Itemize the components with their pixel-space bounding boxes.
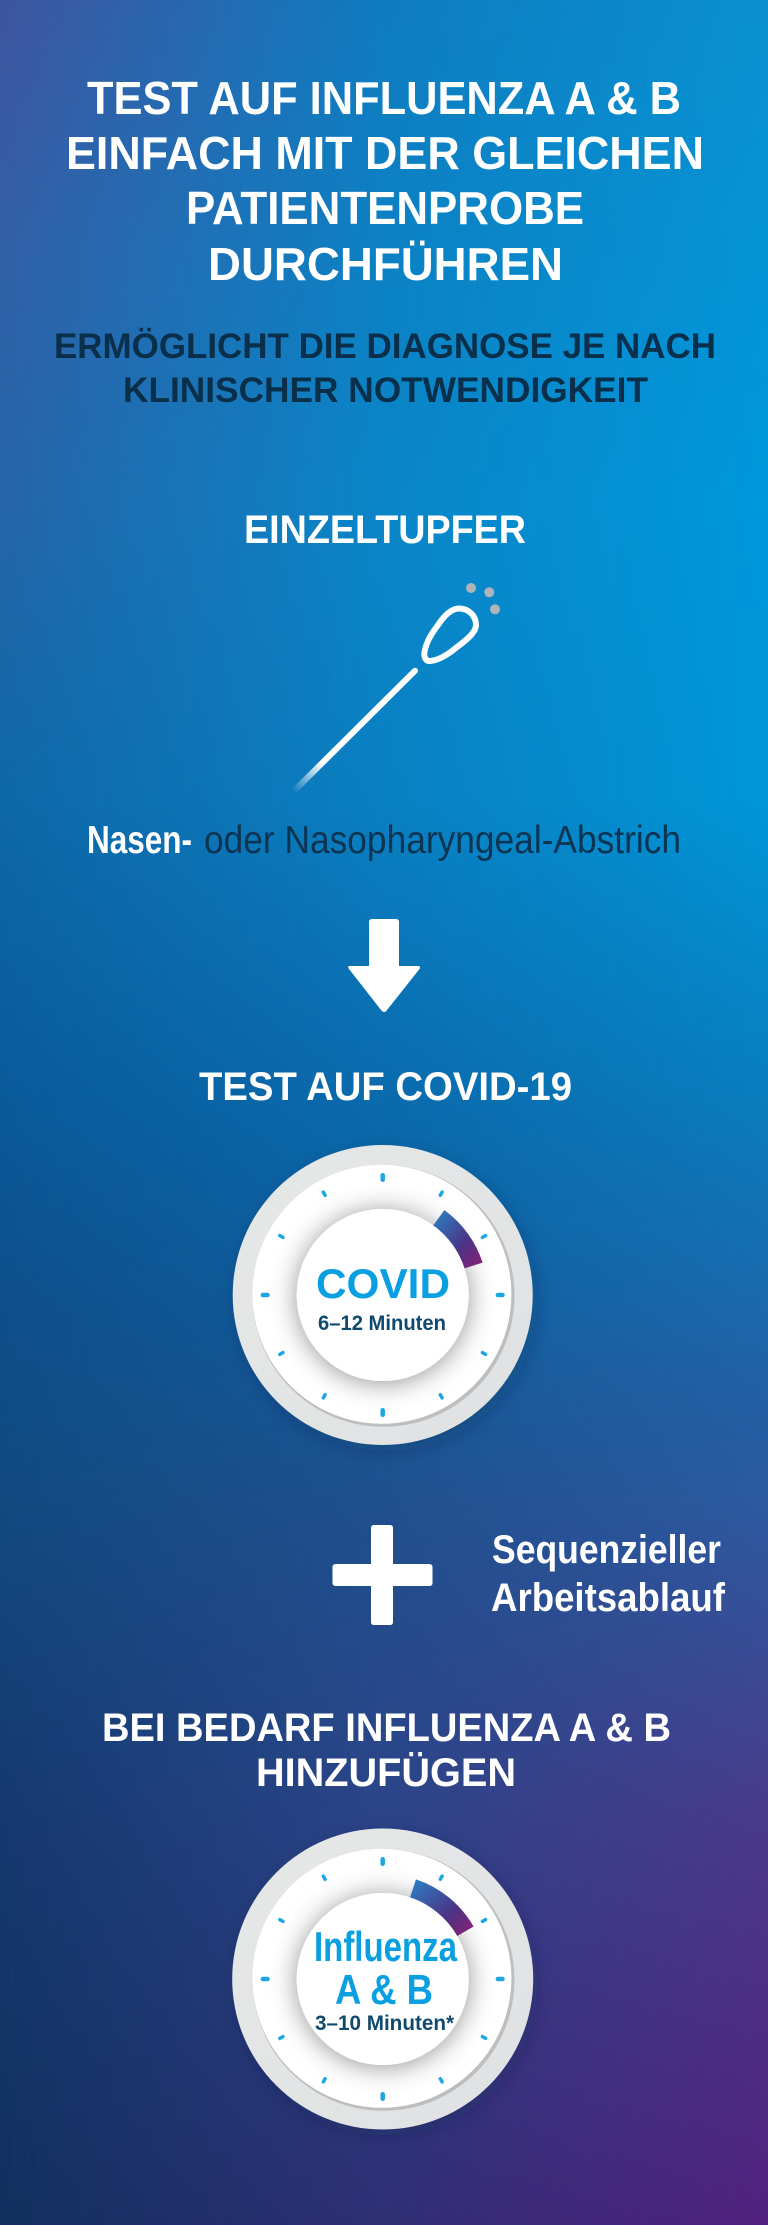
- title: TEST AUF INFLUENZA A & B: [87, 72, 681, 124]
- heading: Test auf COVID-19: TEST AUF COVID-19: [199, 1065, 572, 1109]
- title: PATIENTENPROBE: [186, 182, 584, 234]
- tick marks: [263, 1175, 502, 1415]
- heading: add influenza: BEI BEDARF INFLUENZA A & B: [102, 1706, 671, 1750]
- subtitle: ERMÖGLICHT DIE DIAGNOSE JE NACH: [54, 327, 716, 366]
- clock label: Influenza A & B: [314, 1923, 457, 2013]
- clock: influenza: [232, 1828, 533, 2130]
- swab description: Nasen-: [87, 819, 192, 862]
- label: sequential workflow: Sequenzieller: [492, 1528, 721, 1572]
- clock: COVID: [233, 1145, 533, 1445]
- heading: add influenza: HINZUFÜGEN: [256, 1750, 516, 1795]
- subtitle: KLINISCHER NOTWENDIGKEIT: [123, 371, 648, 410]
- subtitle: [54, 327, 716, 410]
- progress arc: [433, 1210, 483, 1268]
- clock label: COVID: COVID: [316, 1260, 450, 1307]
- inner dial: [297, 1893, 469, 2065]
- heading: add influenza: [102, 1706, 671, 1795]
- icon: plus: [332, 1525, 432, 1625]
- clock label: Influenza A & B: A & B: [335, 1966, 433, 2013]
- tick marks: [263, 1859, 502, 2099]
- title: DURCHFÜHREN: [208, 238, 563, 290]
- progress arc: [410, 1879, 474, 1936]
- title: [66, 72, 704, 290]
- icon: swab: [293, 583, 500, 792]
- heading: Einzeltupfer: EINZELTUPFER: [244, 508, 526, 552]
- label: sequential workflow: Arbeitsablauf: [491, 1576, 726, 1620]
- label: sequential workflow: [491, 1528, 726, 1620]
- clock time: 3–10 Minuten: 3–10 Minuten*: [315, 2012, 455, 2035]
- inner dial: [297, 1209, 469, 1381]
- title: EINFACH MIT DER GLEICHEN: [66, 127, 704, 179]
- clock label: Influenza A & B: Influenza: [314, 1923, 457, 1970]
- swab description: oder Nasopharyngeal-Abstrich: [204, 819, 681, 862]
- clock time: 6–12 Minuten: 6–12 Minuten: [318, 1312, 446, 1335]
- arrow down: [348, 919, 420, 1012]
